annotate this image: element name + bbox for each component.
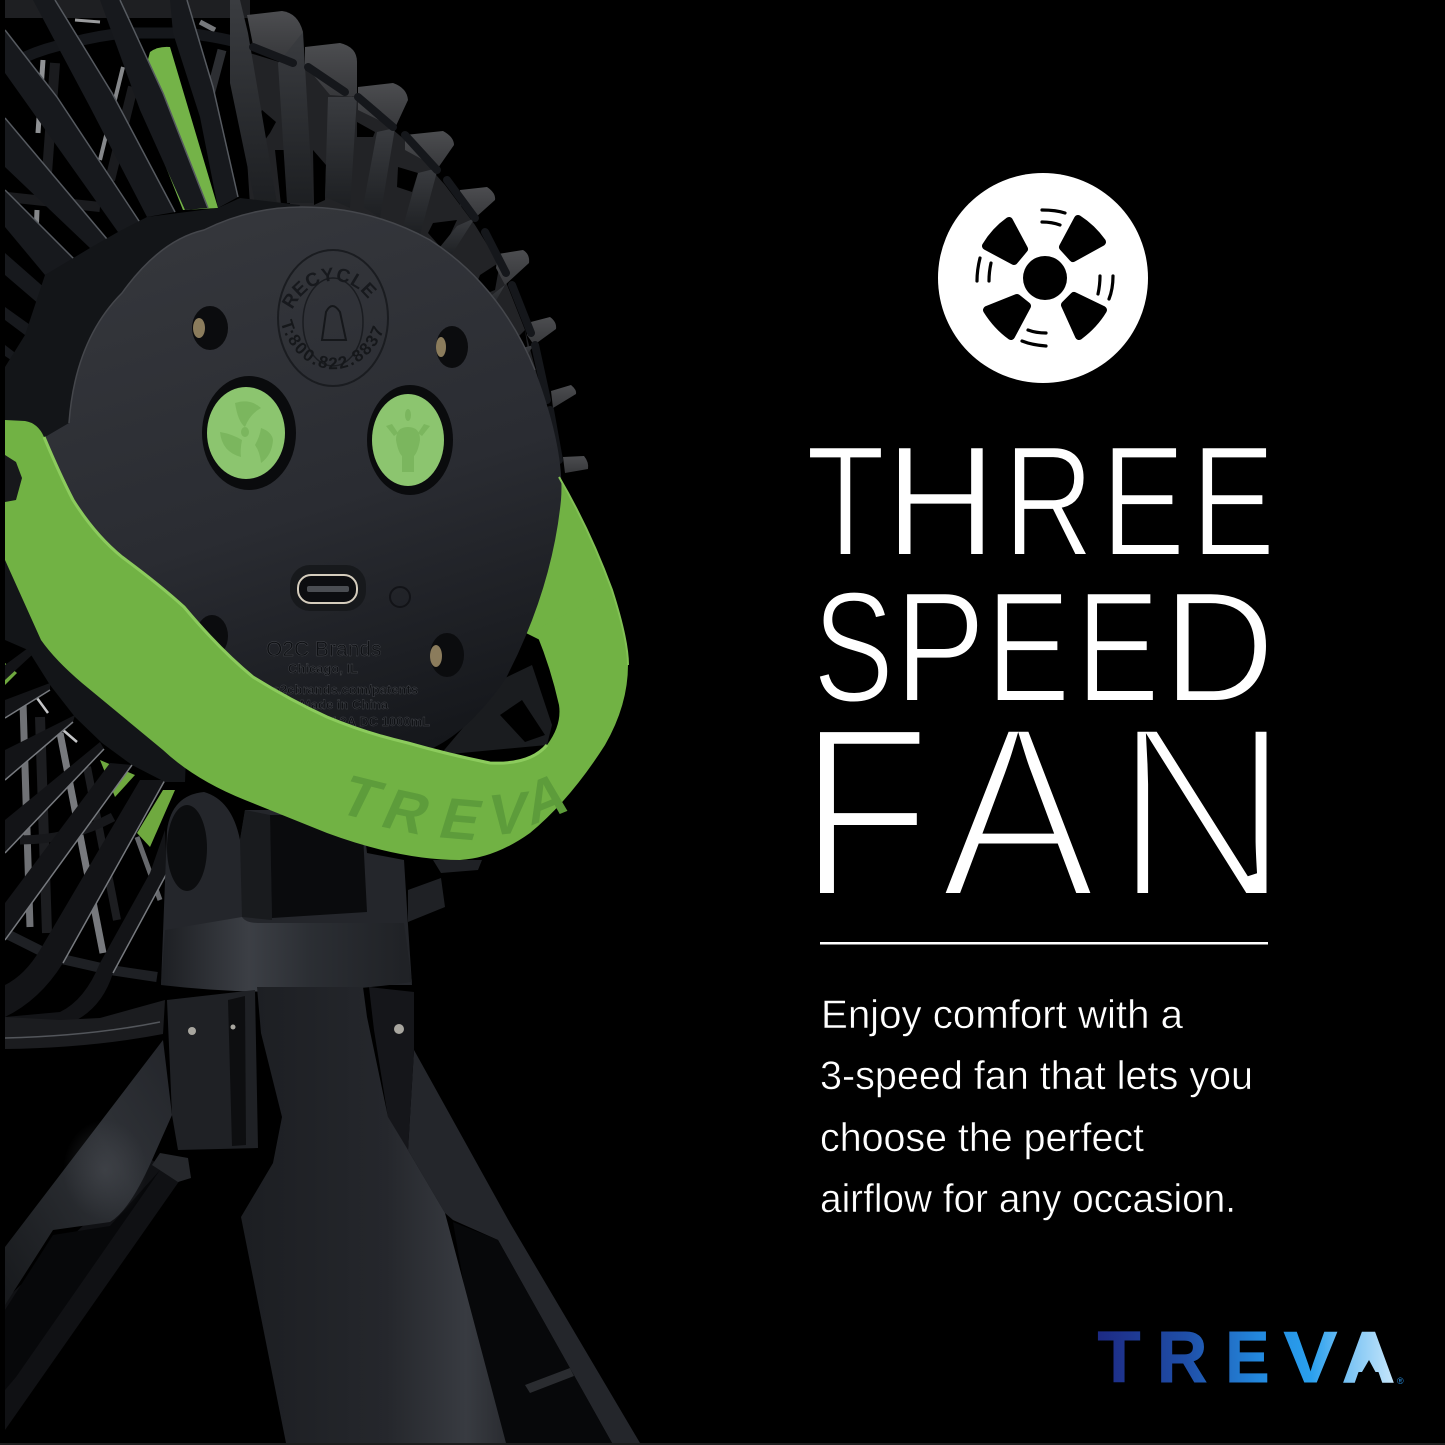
registered mark: ® bbox=[1397, 1376, 1404, 1386]
logo A notch bbox=[1355, 1360, 1382, 1384]
silver struts lower bbox=[20, 698, 160, 953]
moulded brand text: 5V 2A DC 1000mL bbox=[320, 714, 430, 729]
strap rear limb bbox=[526, 482, 612, 640]
port opening bbox=[298, 575, 357, 603]
headline line: FAN bbox=[799, 673, 1292, 951]
icon blades bbox=[986, 219, 1103, 336]
headline line: FAN: N bbox=[1112, 673, 1292, 951]
strap moulded logo bbox=[329, 759, 571, 853]
spoke edge highlights bbox=[5, 0, 238, 260]
back disc bbox=[46, 206, 562, 748]
green blade lower bbox=[5, 663, 175, 847]
stand bbox=[5, 792, 640, 1443]
moulded brand text: Made in China bbox=[300, 697, 389, 712]
stamp text top: RECYCLE bbox=[282, 268, 377, 308]
stamp bell bbox=[322, 306, 346, 340]
strap bright edge outer bbox=[559, 477, 628, 665]
logo wordmark: E bbox=[1225, 1317, 1269, 1398]
mid grey mesh behind ribs bbox=[248, 54, 538, 376]
headline line: SPEED: S bbox=[813, 560, 894, 736]
strap moulded logo: A bbox=[521, 759, 571, 839]
left leg highlight bbox=[72, 1132, 125, 1197]
headline bbox=[799, 414, 1292, 951]
left leg knob bbox=[152, 1153, 191, 1182]
light button cap bbox=[372, 394, 444, 486]
bulb icon bbox=[386, 409, 430, 472]
pivot recess bbox=[270, 815, 367, 918]
lower spoke highlights bbox=[5, 690, 167, 973]
green strap front bbox=[5, 420, 628, 860]
headline line: THREE: T bbox=[806, 414, 885, 590]
logo wordmark: V bbox=[1284, 1317, 1337, 1398]
strap loop holes bbox=[500, 700, 545, 742]
light button bbox=[367, 385, 453, 495]
strap body bbox=[5, 420, 628, 860]
divider rule bbox=[820, 942, 1268, 944]
moulded brand text bbox=[266, 638, 430, 729]
icon hub bbox=[1023, 256, 1067, 300]
headline line: FAN: A bbox=[940, 675, 1096, 950]
fan button cap bbox=[207, 387, 285, 479]
grille pieces below strap bbox=[408, 860, 482, 922]
strap moulded logo: E bbox=[432, 787, 490, 853]
stamp text bottom: T:800.822.8837 bbox=[282, 318, 382, 370]
logo wordmark bbox=[1098, 1317, 1395, 1398]
stamp outline bbox=[278, 250, 388, 386]
left tripod leg bbox=[5, 1040, 191, 1430]
grille ring segments bbox=[253, 47, 559, 460]
left bracket shadow bbox=[228, 996, 246, 1146]
grille rim bottom bbox=[5, 1000, 165, 1049]
body text: Enjoy comfort with a bbox=[821, 993, 1184, 1037]
grille teeth: ribs bbox=[230, 0, 534, 362]
lower ring bbox=[5, 933, 157, 977]
icon disc bbox=[938, 173, 1148, 383]
headline line: SPEED: E bbox=[1076, 560, 1159, 736]
fan grille bbox=[5, 0, 588, 1049]
port surround bbox=[290, 565, 366, 611]
motor housing cone bbox=[5, 198, 300, 782]
treva logo bbox=[1098, 1317, 1404, 1398]
headline line: THREE: E bbox=[1191, 414, 1275, 590]
stamp inner circle bbox=[303, 278, 363, 366]
pivot side hole bbox=[167, 805, 207, 891]
logo wordmark: T bbox=[1098, 1317, 1140, 1398]
pivot highlight column bbox=[240, 810, 272, 920]
moulded brand text: o2cbrands.com/patents bbox=[272, 682, 418, 697]
usb-c port bbox=[290, 565, 366, 611]
small stamp mark bbox=[390, 587, 410, 607]
body text: choose the perfect bbox=[820, 1116, 1144, 1160]
headline line: SPEED: P bbox=[895, 560, 986, 736]
fan button bbox=[202, 376, 296, 490]
fan button well bbox=[202, 376, 296, 490]
headline line: FAN: F bbox=[799, 676, 931, 948]
headline line: THREE: H bbox=[885, 414, 997, 590]
left leg recess bbox=[5, 1170, 160, 1390]
moulded brand text: O2C Brands bbox=[266, 638, 382, 661]
right tripod leg bbox=[408, 1050, 640, 1443]
strap moulded logo: T bbox=[329, 765, 393, 832]
green fan blade seen through grille bbox=[148, 46, 218, 210]
right bracket bbox=[369, 987, 414, 1150]
body text: airflow for any occasion. bbox=[820, 1177, 1236, 1221]
headline line: SPEED: E bbox=[986, 560, 1070, 736]
silver struts behind spokes bbox=[8, 18, 226, 223]
bottom edge line bbox=[0, 1443, 1445, 1445]
headline line: SPEED bbox=[813, 560, 1275, 736]
grille ring left bbox=[23, 28, 230, 61]
pivot arm and collar base bbox=[161, 792, 412, 985]
headline line: SPEED: D bbox=[1163, 560, 1275, 736]
logo wordmark: A bbox=[1342, 1317, 1395, 1398]
strap bright edge inner bbox=[44, 437, 547, 763]
left bracket bbox=[167, 990, 258, 1150]
grille spokes upper bbox=[5, 0, 238, 362]
right leg brace bbox=[525, 1368, 574, 1393]
strap moulded logo: R bbox=[373, 778, 440, 847]
light button well bbox=[367, 385, 453, 495]
recycle stamp bbox=[277, 249, 389, 387]
grille spokes lower bbox=[5, 648, 167, 1037]
strap moulded logo: V bbox=[486, 780, 531, 849]
left leg dark lower strip bbox=[5, 1160, 180, 1430]
disc rim highlight bbox=[69, 207, 535, 423]
right leg recess bbox=[453, 1222, 612, 1443]
logo wordmark: R bbox=[1157, 1317, 1207, 1398]
fan button icon bbox=[220, 401, 273, 463]
body text bbox=[820, 993, 1253, 1221]
icon motion marks bbox=[977, 210, 1113, 346]
bracket rivets bbox=[188, 1024, 404, 1035]
screws bbox=[192, 306, 468, 677]
center tripod leg bbox=[241, 987, 506, 1443]
moulded brand text: Chicago, IL bbox=[288, 661, 358, 676]
grille top strip bbox=[5, 0, 250, 18]
headline line: THREE: E bbox=[1101, 414, 1185, 590]
logo A counter fill bbox=[1354, 1336, 1384, 1372]
grille teeth: outer panels bbox=[247, 11, 588, 473]
strap pin bbox=[5, 455, 22, 502]
product photo: fan on tripod bbox=[5, 0, 640, 1443]
left leg body bbox=[5, 1040, 172, 1305]
collar bbox=[161, 917, 412, 992]
right leg body bbox=[408, 1050, 640, 1443]
grille pieces inside strap loop bbox=[440, 665, 552, 755]
headline line: THREE bbox=[806, 414, 1275, 590]
fan icon bbox=[938, 173, 1148, 383]
mesh holes bbox=[262, 110, 528, 347]
rim highlight bbox=[5, 1022, 160, 1038]
body text: 3-speed fan that lets you bbox=[820, 1054, 1253, 1098]
port tongue bbox=[307, 586, 349, 592]
headline line: THREE: R bbox=[1004, 414, 1094, 590]
disc body bbox=[40, 207, 561, 770]
